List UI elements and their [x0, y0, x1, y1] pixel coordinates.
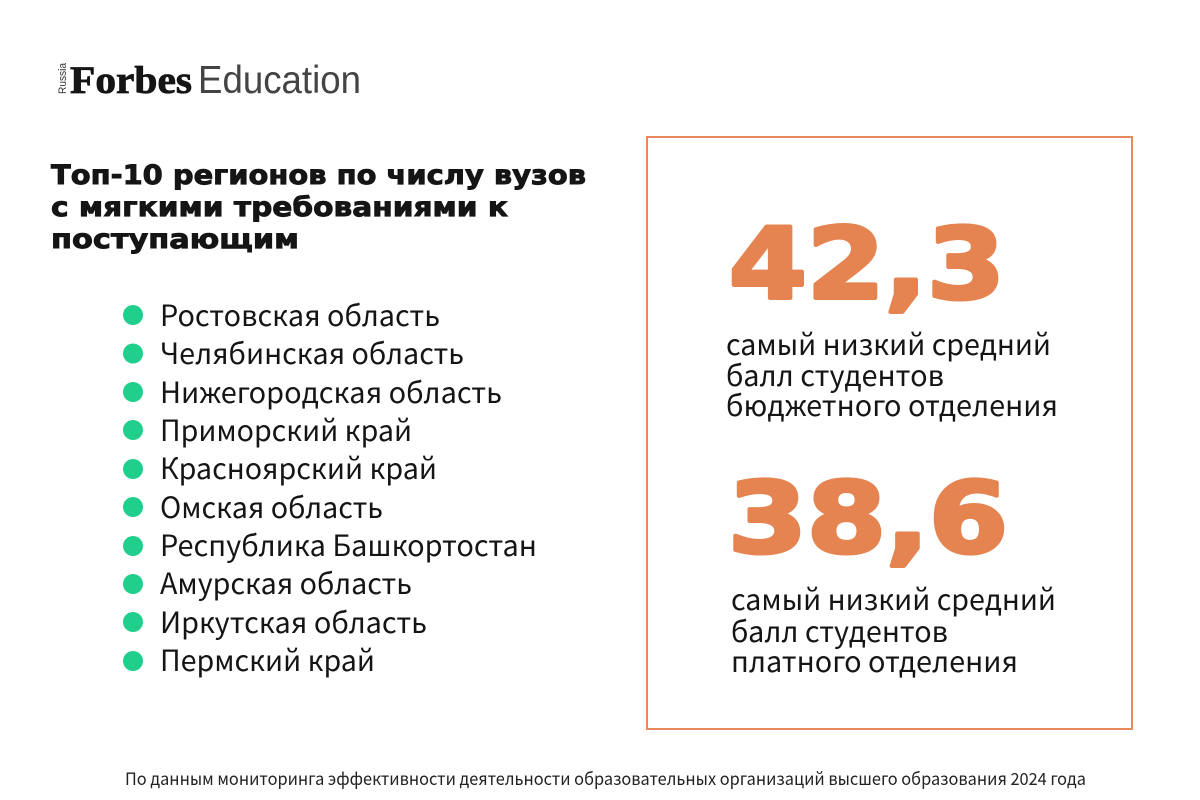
stat: paid score description: самый низкий средний: [731, 577, 1056, 619]
list of regions: Омская область: [160, 485, 383, 527]
list of regions: Ростовская область: [160, 293, 440, 335]
logo: Forbes Education: Forbes: [70, 59, 192, 102]
list of regions: Пермский край: [160, 638, 375, 680]
logo: Forbes Education: Education: [198, 59, 361, 102]
source note: По данным мониторинга эффективности деятельности образовательных организаций высшего образования 2024 года: [125, 765, 1086, 790]
stat: budget score description: балл студентов: [726, 353, 944, 395]
stat: paid score description: балл студентов: [731, 609, 948, 651]
stat: paid score number: 38,6: [728, 462, 1008, 576]
list of regions: Приморский край: [160, 408, 412, 450]
logo: Forbes Education: Russia: [57, 62, 69, 94]
panel: statistics: [647, 137, 1132, 729]
list of regions: Республика Башкортостан: [160, 523, 537, 565]
list of regions: Красноярский край: [160, 446, 437, 488]
list of regions: Амурская область: [160, 561, 412, 603]
stat: paid score description: платного отделения: [731, 639, 1018, 681]
logo: Forbes Education: [57, 59, 361, 102]
stat: budget score number: 42,3: [729, 208, 1005, 322]
list of regions: Нижегородская область: [160, 370, 502, 412]
stat: budget score description: бюджетного отделения: [726, 383, 1058, 425]
heading: с мягкими требованиями к: [51, 192, 508, 223]
heading: Топ-10 регионов по числу вузов: [51, 160, 586, 191]
list of regions: Иркутская область: [160, 600, 427, 642]
list of regions: Челябинская область: [160, 331, 464, 373]
list of regions: [123, 293, 537, 680]
stat: paid score description: [731, 577, 1056, 681]
stat: budget score description: [726, 322, 1058, 425]
stat: budget score description: самый низкий средний: [726, 322, 1051, 364]
heading: поступающим: [51, 224, 299, 255]
heading: [51, 160, 586, 255]
